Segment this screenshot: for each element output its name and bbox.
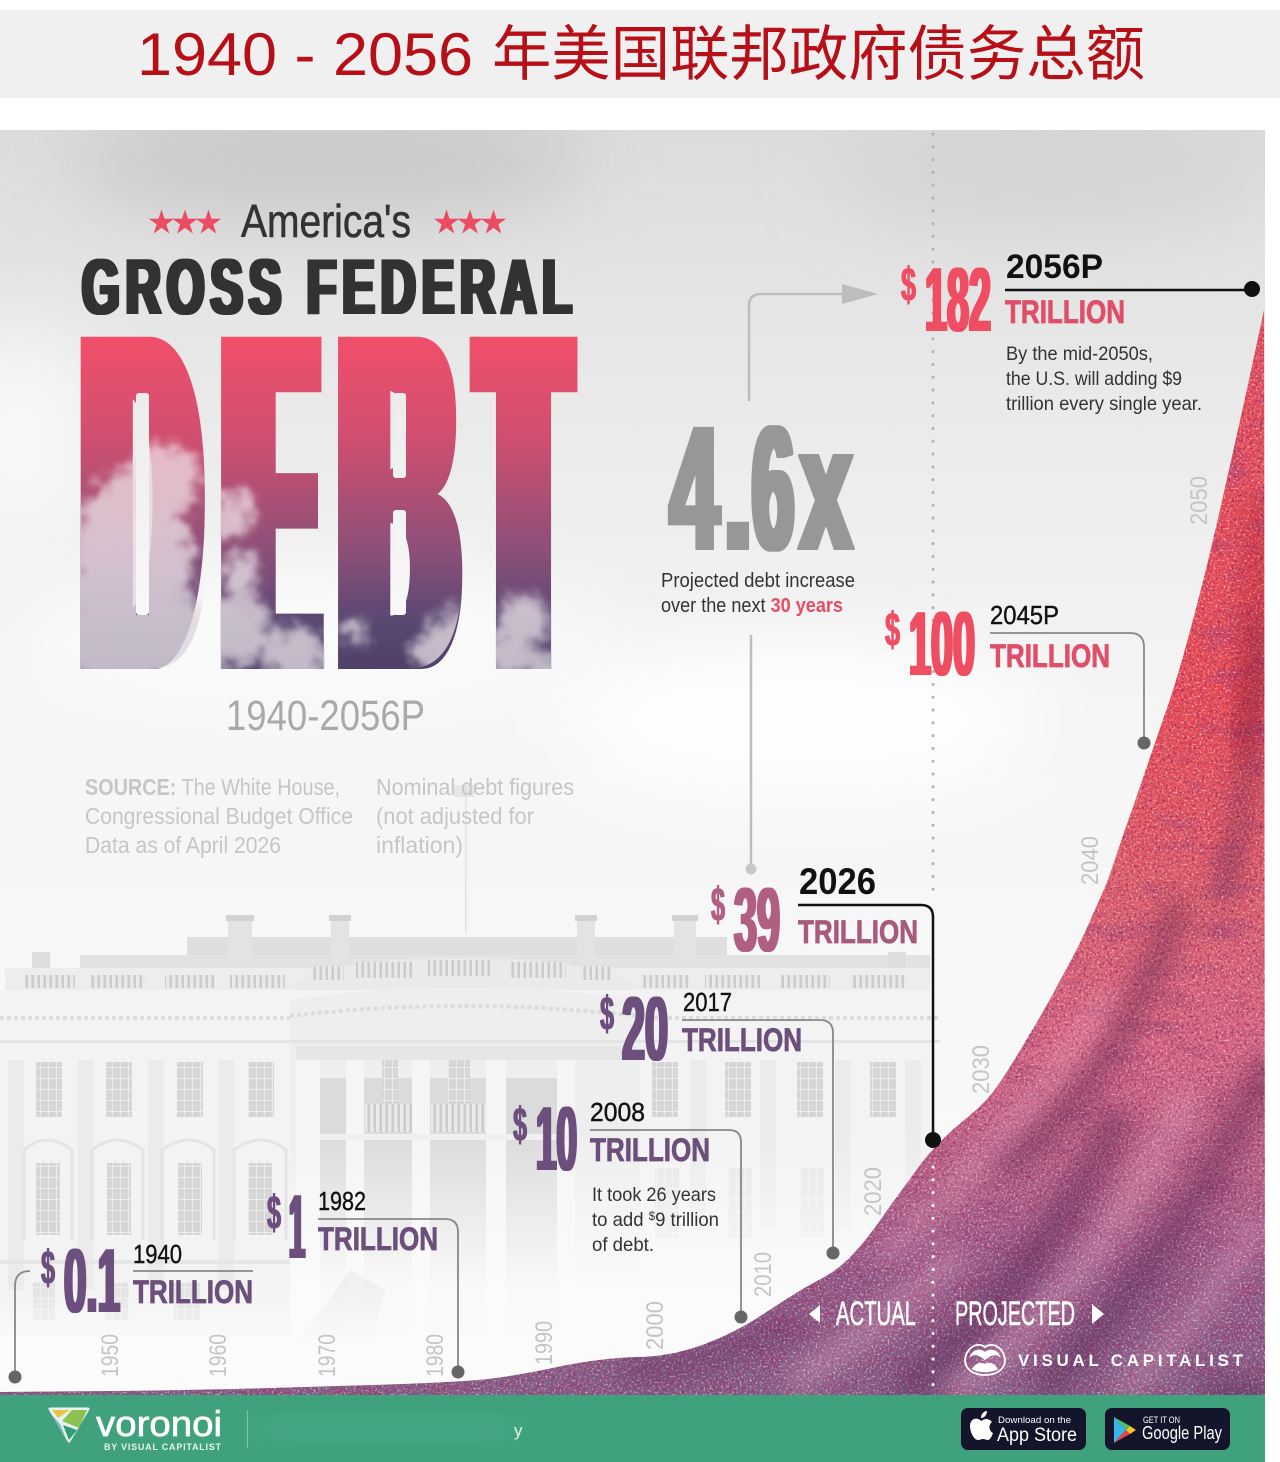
milestone: 1940 $0.1 trillion: TRILLION: [133, 1274, 253, 1310]
heading: DEBT: T: [487, 236, 560, 771]
year axis labels: 2010: [750, 1252, 777, 1297]
milestone: 2026 $39 trillion: [711, 861, 941, 1148]
background panel with clouds: [0, 130, 1265, 930]
milestone: 1982 $1 trillion: $: [267, 1187, 281, 1240]
year axis labels: [97, 476, 1213, 1377]
heading: DEBT: D: [85, 233, 196, 770]
button: App Store: [961, 1408, 1086, 1450]
milestone: 2017 $20 trillion: 20: [622, 979, 668, 1080]
blurred footer text: [265, 1420, 523, 1440]
source note: [85, 774, 353, 858]
source note: Data as of April 2026: [85, 832, 281, 858]
milestone: 2026 $39 trillion: TRILLION: [798, 914, 918, 950]
year axis labels: 2030: [968, 1045, 995, 1094]
milestone: 1940 $0.1 trillion: 0.1: [64, 1231, 120, 1332]
milestone: 1982 $1 trillion: 1982: [318, 1186, 366, 1216]
Visual Capitalist logo: [965, 1345, 1244, 1375]
milestone: 2045P $100 trillion: 2045P: [990, 600, 1059, 630]
milestone note: the U.S. will adding $9: [1006, 368, 1182, 390]
button: App Store: App Store: [997, 1425, 1077, 1446]
Visual Capitalist logo: VISUAL CAPITALIST: [1018, 1351, 1244, 1370]
source note: Congressional Budget Office: [85, 803, 353, 829]
callout: 4.6x: x: [800, 388, 852, 587]
callout: 4.6x: [661, 388, 855, 617]
data note: inflation): [376, 832, 463, 858]
milestone note: to add: [592, 1209, 646, 1231]
arrow: growth connector: [746, 284, 878, 874]
milestone: 2045P $100 trillion: $: [885, 604, 900, 657]
button: Google Play: [1105, 1408, 1230, 1450]
milestone: 2008 $10 trillion: TRILLION: [590, 1132, 710, 1168]
milestone: 2008 $10 trillion: $: [513, 1099, 527, 1152]
milestone: 1940 $0.1 trillion: [8, 1231, 253, 1384]
milestone: 1940 $0.1 trillion: 1940: [133, 1239, 182, 1269]
data note: Nominal debt figures: [376, 774, 574, 800]
callout: 4.6x: 4: [670, 391, 719, 587]
heading: DEBT: B: [343, 233, 454, 770]
milestone note: $: [649, 1209, 655, 1223]
source note: SOURCE: The White House,: [85, 774, 340, 800]
icon: voronoi hexagon logo: [50, 1409, 88, 1441]
milestone: 1940 $0.1 trillion: $: [41, 1242, 55, 1295]
button: Google Play: Google Play: [1142, 1423, 1222, 1443]
milestone: 2056P $182 trillion: 182: [925, 250, 991, 351]
milestone: 2008 $10 trillion: 2008: [590, 1097, 645, 1127]
milestone: 2045P $100 trillion: [885, 594, 1150, 750]
button: Google Play: GET IT ON: [1143, 1415, 1180, 1425]
heading: America's: [148, 195, 507, 247]
year axis labels: 1980: [422, 1334, 449, 1377]
milestone: 2026 $39 trillion: $: [711, 879, 725, 932]
date range: 1940-2056P: [226, 692, 425, 740]
milestone: 1982 $1 trillion: TRILLION: [318, 1221, 438, 1257]
milestone: 2056P $182 trillion: $: [901, 259, 916, 312]
title: 1940 - 2056: [137, 21, 473, 88]
White House illustration: [0, 785, 940, 1395]
milestone: 1982 $1 trillion: 1: [289, 1177, 305, 1278]
year axis labels: 1970: [314, 1334, 341, 1377]
milestone: 2008 $10 trillion: [513, 1089, 748, 1324]
data note: (not adjusted for: [376, 803, 534, 829]
milestone: 2008 $10 trillion: 10: [536, 1089, 577, 1190]
milestone note: By the mid-2050s,: [1006, 343, 1153, 365]
blurred footer text: y: [514, 1421, 523, 1440]
milestone: 1982 $1 trillion: [267, 1177, 464, 1378]
milestone: 2017 $20 trillion: $: [600, 988, 614, 1041]
year axis labels: 1990: [531, 1321, 558, 1365]
button: App Store: Download on the: [998, 1415, 1071, 1426]
milestone note: 9 trillion: [655, 1209, 719, 1231]
year axis labels: 2020: [860, 1167, 887, 1216]
heading: Gross Federal: GROSS FEDERAL: [82, 243, 572, 330]
label: actual: [809, 1295, 916, 1333]
year axis labels: 2040: [1077, 836, 1104, 885]
year axis labels: 1960: [205, 1334, 232, 1377]
heading: America's: America's: [241, 195, 411, 247]
milestone: 2017 $20 trillion: [600, 979, 840, 1260]
projected mountain area chart: [0, 310, 1270, 1395]
milestone: 2056P $182 trillion: TRILLION: [1005, 294, 1125, 330]
milestone note: of debt.: [592, 1234, 654, 1256]
milestone: 2017 $20 trillion: TRILLION: [682, 1022, 802, 1058]
milestone: 2056P $182 trillion: [901, 248, 1260, 415]
voronoi wordmark: voronoi: [96, 1403, 222, 1444]
callout: 4.6x: .: [723, 391, 753, 587]
callout caption: Projected debt increase: [661, 570, 855, 592]
callout caption: [661, 570, 855, 617]
milestone note: It took 26 years: [592, 1184, 716, 1206]
milestone note: [1006, 343, 1202, 415]
heading: DEBT: E: [232, 233, 309, 770]
year axis labels: 2000: [642, 1301, 669, 1350]
milestone: 2017 $20 trillion: 2017: [683, 987, 732, 1017]
callout caption: over the next 30 years: [661, 595, 843, 617]
year axis labels: 1950: [97, 1334, 124, 1377]
milestone: 2026 $39 trillion: 39: [734, 870, 780, 971]
clouds inside the DEBT letters: [81, 434, 552, 669]
heading: America's: ★★★: [433, 208, 507, 238]
heading: DEBT: [80, 336, 578, 669]
callout: 4.6x: 6: [752, 391, 794, 587]
milestone: 2045P $100 trillion: TRILLION: [990, 638, 1110, 674]
label: projected: PROJECTED: [955, 1295, 1075, 1333]
year axis labels: 2050: [1186, 476, 1213, 525]
top title band: [0, 10, 1280, 98]
milestone: 2045P $100 trillion: 100: [909, 594, 975, 695]
milestone: 2056P $182 trillion: 2056P: [1006, 248, 1103, 286]
label: actual: ACTUAL: [836, 1295, 916, 1333]
milestone note: trillion every single year.: [1006, 393, 1202, 415]
heading: America's: ★★★: [148, 208, 222, 238]
actual / projected divider dotted line: [932, 134, 934, 1393]
data note: [376, 774, 574, 858]
milestone: 2026 $39 trillion: 2026: [799, 861, 876, 902]
footer bar: [0, 1395, 1265, 1462]
title: 年美国联邦政府债务总额: [492, 21, 1145, 88]
voronoi tagline: BY VISUAL CAPITALIST: [104, 1442, 222, 1452]
milestone note: [592, 1184, 719, 1256]
